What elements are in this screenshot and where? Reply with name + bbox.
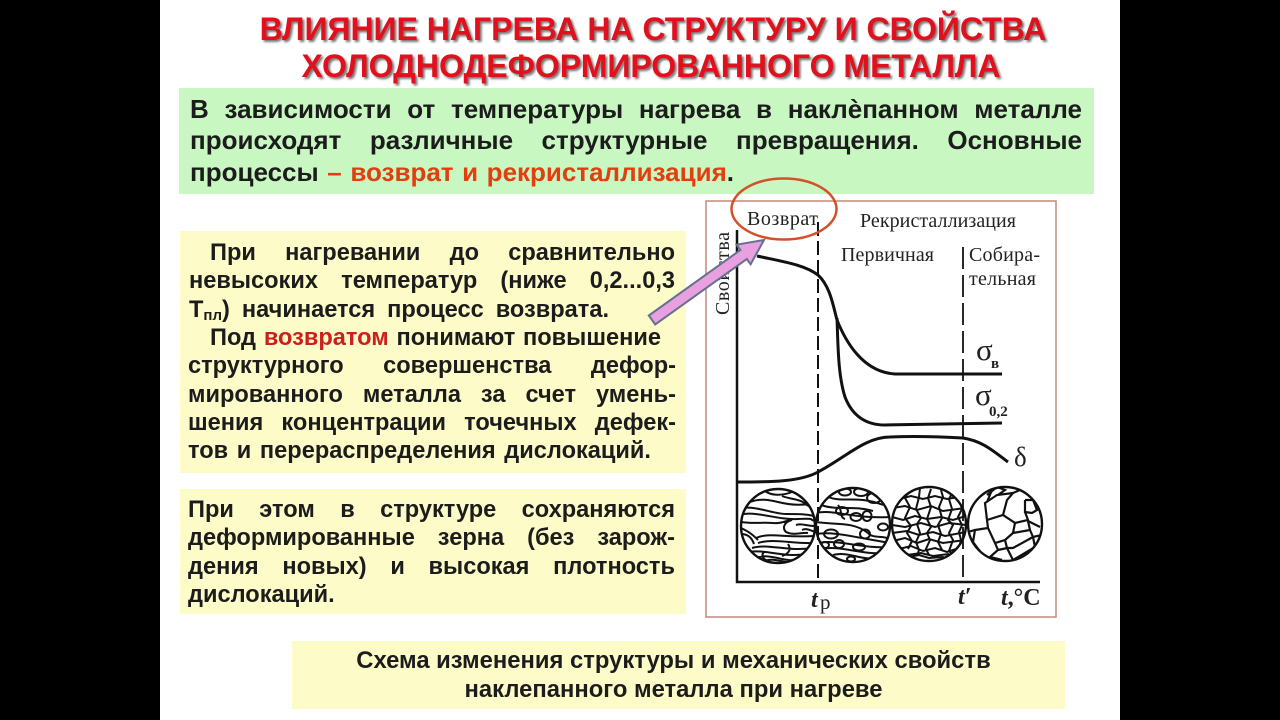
title: ВЛИЯНИЕ НАГРЕВА НА СТРУКТУРУ И СВОЙСТВА (260, 11, 1046, 47)
panel: structure note (180, 489, 686, 614)
zone labels: Рекристаллизация (860, 210, 1016, 232)
panel: recovery explanation: тов и перераспределения дислокаций. (188, 438, 651, 464)
curve labels: δ (1014, 442, 1027, 472)
x-axis labels: t,°C (1001, 585, 1041, 611)
zone labels: Возврат (747, 208, 818, 230)
zone labels: Первичная (841, 244, 934, 266)
microstructure: deformed grains (741, 489, 815, 563)
panel: recovery explanation (180, 231, 686, 473)
panel: recovery explanation: Тпл) начинается процесс возврата. (189, 297, 609, 324)
panel: recovery explanation: структурного совершенства дефор- (188, 353, 676, 379)
curve: delta (737, 437, 1008, 482)
curve labels (975, 332, 1027, 472)
panel: structure note: дения новых) и высокая плотность (188, 554, 675, 580)
slide background (160, 0, 1120, 720)
microstructure: primary recrystallization start (816, 488, 890, 562)
panel: intro text: В зависимости от температуры нагрева в наклѐпанном металле (190, 94, 1082, 124)
panel: structure note: деформированные зерна (без зарож- (188, 525, 675, 551)
x-axis labels: р (820, 590, 830, 614)
panel: caption: Схема изменения структуры и механических свойств (356, 647, 991, 674)
x-axis labels: t (811, 587, 819, 613)
panel: intro text (179, 88, 1094, 194)
title: ХОЛОДНОДЕФОРМИРОВАННОГО МЕТАЛЛА (302, 48, 1000, 84)
axis label: properties: Свойства (712, 232, 734, 315)
curve labels: 0,2 (989, 404, 1008, 420)
curve labels: в (991, 356, 999, 372)
chart frame (706, 201, 1056, 617)
curve: sigma 0.2 (837, 318, 1002, 425)
panel: structure note: При этом в структуре сохраняются (188, 497, 675, 523)
chart: properties vs temperature (648, 177, 1057, 618)
panel: recovery explanation: мированного металла за счет умень- (188, 382, 676, 408)
panel: recovery explanation: Под возвратом понимают повышение (210, 325, 661, 351)
x-axis labels (811, 584, 1041, 614)
axes (737, 222, 1040, 582)
curve labels: σ (976, 332, 993, 367)
panel: structure note: дислокаций. (188, 582, 335, 608)
panel: recovery explanation: невысоких температур (ниже 0,2...0,3 (189, 268, 675, 294)
panel: recovery explanation: шения концентрации точечных дефек- (188, 410, 676, 436)
panel: recovery explanation: При нагревании до сравнительно (210, 240, 675, 266)
zone labels (747, 208, 1040, 290)
callout ellipse (732, 178, 836, 240)
panel: intro text: происходят различные структурные превращения. Основные (190, 125, 1082, 155)
zone labels: тельная (969, 268, 1036, 290)
panel: caption: наклепанного металла при нагреве (465, 676, 882, 703)
microstructure: grain growth (968, 487, 1042, 561)
curve: sigma b (757, 256, 1002, 374)
panel: caption (292, 641, 1065, 709)
arrow (649, 240, 764, 324)
microstructure: primary recrystallization end (892, 487, 966, 561)
panel: intro text: процессы – возврат и рекристаллизация. (190, 157, 734, 187)
curve labels: σ (975, 377, 992, 412)
x-axis labels: t′ (958, 584, 971, 610)
zone labels: Собира- (969, 244, 1040, 266)
title (260, 10, 1048, 87)
